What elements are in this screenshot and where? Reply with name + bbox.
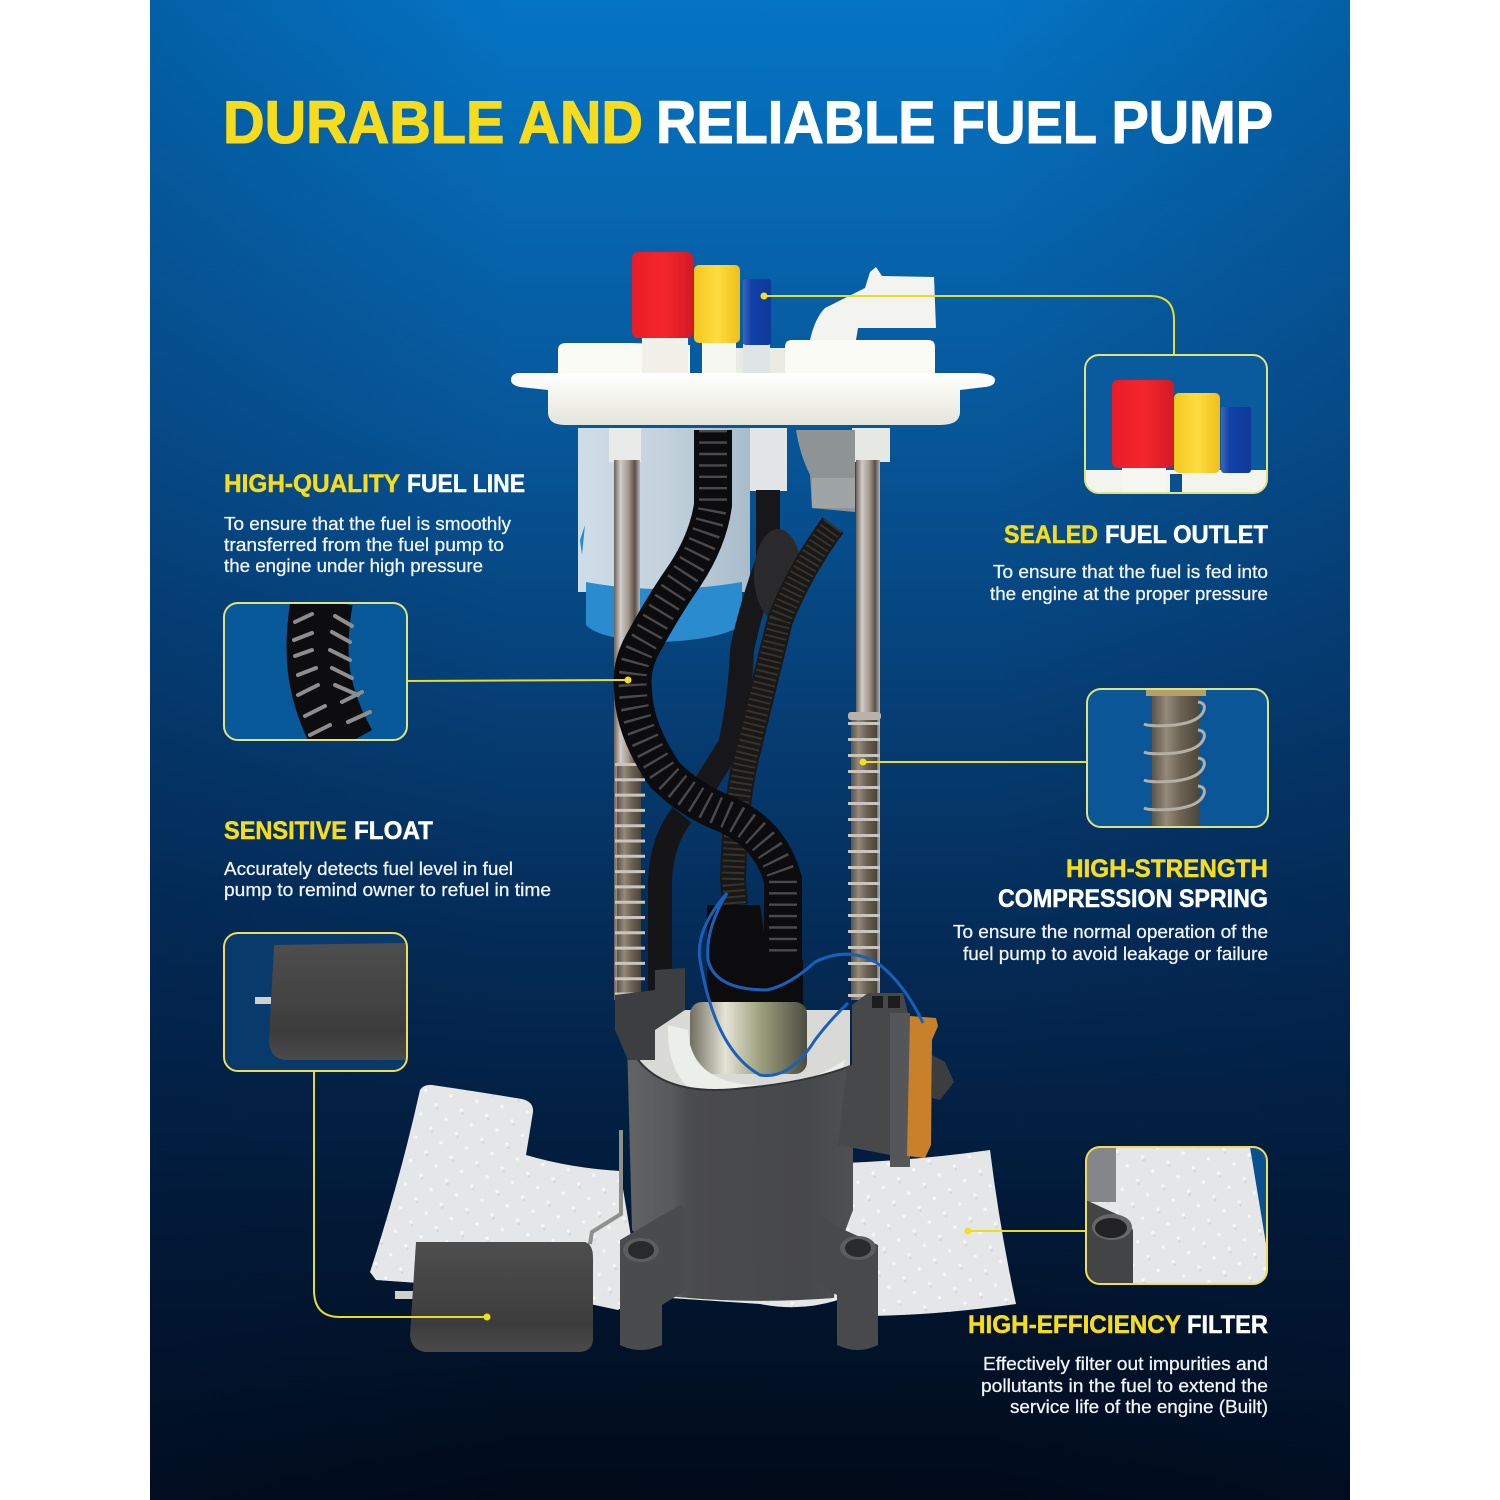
heading: high-quality fuel line: HIGH-QUALITY: [224, 470, 400, 498]
title: [223, 89, 1273, 156]
filter canister: [578, 428, 750, 642]
blue wires: [699, 893, 923, 1076]
text: float description: pump to remind owner to refuel in time: [224, 879, 551, 900]
heading: sealed fuel outlet: SEALED: [1004, 521, 1098, 549]
inset: caps: [1085, 355, 1267, 493]
corrugated fuel line: [632, 430, 783, 975]
text: fuel outlet description: [990, 561, 1268, 604]
text: fuel line description: [224, 513, 512, 576]
heading: sensitive float: SENSITIVE: [224, 817, 347, 845]
red cap: [632, 252, 693, 375]
text: spring description: [953, 921, 1268, 964]
grey connector: [796, 430, 855, 512]
heading: sealed fuel outlet: FUEL OUTLET: [1105, 521, 1268, 549]
heading: high-quality fuel line: FUEL LINE: [407, 470, 525, 498]
heading: high-efficiency filter: HIGH-EFFICIENCY: [968, 1311, 1181, 1339]
heading: sensitive float: [224, 817, 433, 845]
side connector: [838, 993, 954, 1167]
text: filter description: service life of the engine (Built): [1010, 1396, 1268, 1417]
text: fuel outlet description: the engine at the proper pressure: [990, 583, 1268, 604]
text: fuel line description: transferred from the fuel pump to: [224, 534, 504, 555]
inset: float: [224, 933, 407, 1071]
flange plate: [511, 373, 995, 425]
inset: corrugated hose: [224, 600, 407, 745]
flange upper bosses: [558, 340, 935, 375]
yellow cap: [694, 265, 740, 375]
leader line: fuel line: [407, 676, 632, 684]
title: RELIABLE FUEL PUMP: [656, 89, 1273, 156]
float arm: [590, 1130, 621, 1244]
text: float description: Accurately detects fuel level in fuel: [224, 858, 513, 879]
guide rods: [614, 460, 880, 1000]
heading: sealed fuel outlet: [1004, 521, 1268, 549]
fuel pump product illustration: [370, 252, 1016, 1352]
float: [395, 1242, 593, 1352]
leader line: float: [314, 1071, 490, 1320]
leader line: spring: [860, 758, 1087, 766]
heading: high-strength compression spring: COMPRESSION SPRING: [998, 885, 1268, 913]
leader line: filter: [964, 1228, 1086, 1234]
text: fuel outlet description: To ensure that the fuel is fed into: [993, 561, 1268, 582]
pump motor and inner filter: [640, 905, 850, 1110]
white pods under flange: [609, 428, 890, 491]
text: filter description: pollutants in the fuel to extend the: [981, 1375, 1268, 1396]
filter sock: [370, 1085, 1016, 1316]
background panel: [150, 0, 1350, 1500]
leader line: fuel outlet: [760, 292, 1174, 355]
return hose and regulator: [660, 490, 802, 1000]
pump base cup: [627, 1040, 853, 1301]
inset: filter: [1086, 1147, 1267, 1284]
heading: high-quality fuel line: [224, 470, 525, 498]
text: spring description: fuel pump to avoid leakage or failure: [963, 943, 1268, 964]
title: DURABLE AND: [223, 89, 643, 156]
heading: high-strength compression spring: HIGH-STRENGTH: [1066, 855, 1268, 883]
text: fuel line description: To ensure that the fuel is smoothly: [224, 513, 512, 534]
rod brackets: [615, 968, 685, 1060]
text: filter description: Effectively filter out impurities and: [983, 1353, 1268, 1374]
base feet: [620, 1205, 878, 1350]
heading: high-strength compression spring: [998, 855, 1268, 913]
text: float description: [224, 858, 551, 900]
blue cap: [743, 279, 771, 374]
braided wire loom: [733, 525, 833, 905]
text: spring description: To ensure the normal operation of the: [953, 921, 1268, 942]
inset: spring: [1087, 689, 1268, 827]
heading: high-efficiency filter: FILTER: [1187, 1311, 1268, 1339]
heading: sensitive float: FLOAT: [354, 817, 433, 845]
white electrical connector: [810, 267, 936, 340]
text: fuel line description: the engine under high pressure: [224, 555, 483, 576]
compression springs: [617, 712, 881, 1000]
text: filter description: [981, 1353, 1268, 1417]
